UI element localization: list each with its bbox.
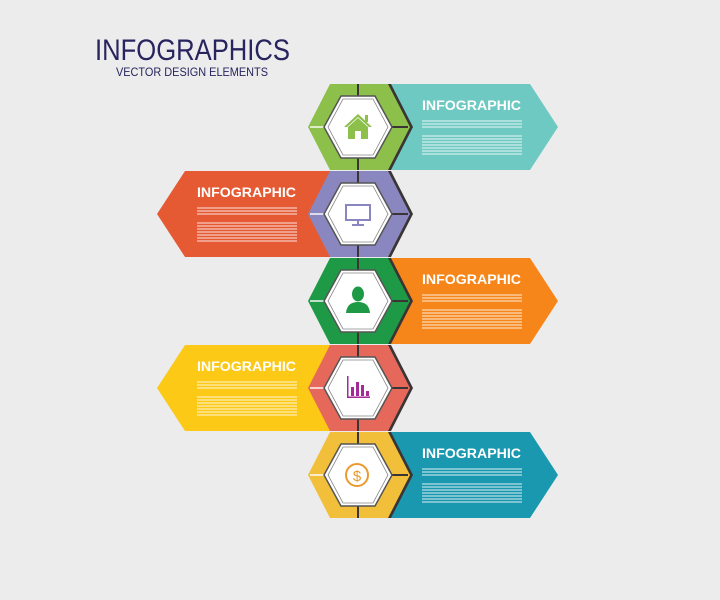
row 5: blue arrow with dollar icon bbox=[308, 432, 558, 518]
row 3: orange arrow with person icon bbox=[308, 258, 558, 344]
row 5: blue arrow with dollar icon: INFOGRAPHIC bbox=[422, 446, 521, 461]
row 4: yellow arrow with chart icon bbox=[157, 345, 413, 431]
row 2: red arrow with monitor icon bbox=[157, 171, 413, 257]
row 1: teal arrow with home icon: INFOGRAPHIC bbox=[422, 98, 521, 113]
title bbox=[95, 34, 290, 79]
row 3: orange arrow with person icon: INFOGRAPHIC bbox=[422, 272, 521, 287]
icon: dollar coin bbox=[346, 464, 368, 486]
title: VECTOR DESIGN ELEMENTS bbox=[116, 65, 268, 79]
row 1: teal arrow with home icon bbox=[308, 84, 558, 170]
icon: home bbox=[344, 114, 372, 139]
icon: dollar coin: $ bbox=[353, 468, 362, 485]
row 4: yellow arrow with chart icon: INFOGRAPHIC bbox=[197, 359, 296, 374]
row 2: red arrow with monitor icon: INFOGRAPHIC bbox=[197, 185, 296, 200]
icon: bar chart bbox=[347, 376, 370, 398]
icon: person bbox=[346, 286, 370, 313]
icon: monitor bbox=[346, 205, 370, 225]
title: INFOGRAPHICS bbox=[95, 34, 290, 67]
